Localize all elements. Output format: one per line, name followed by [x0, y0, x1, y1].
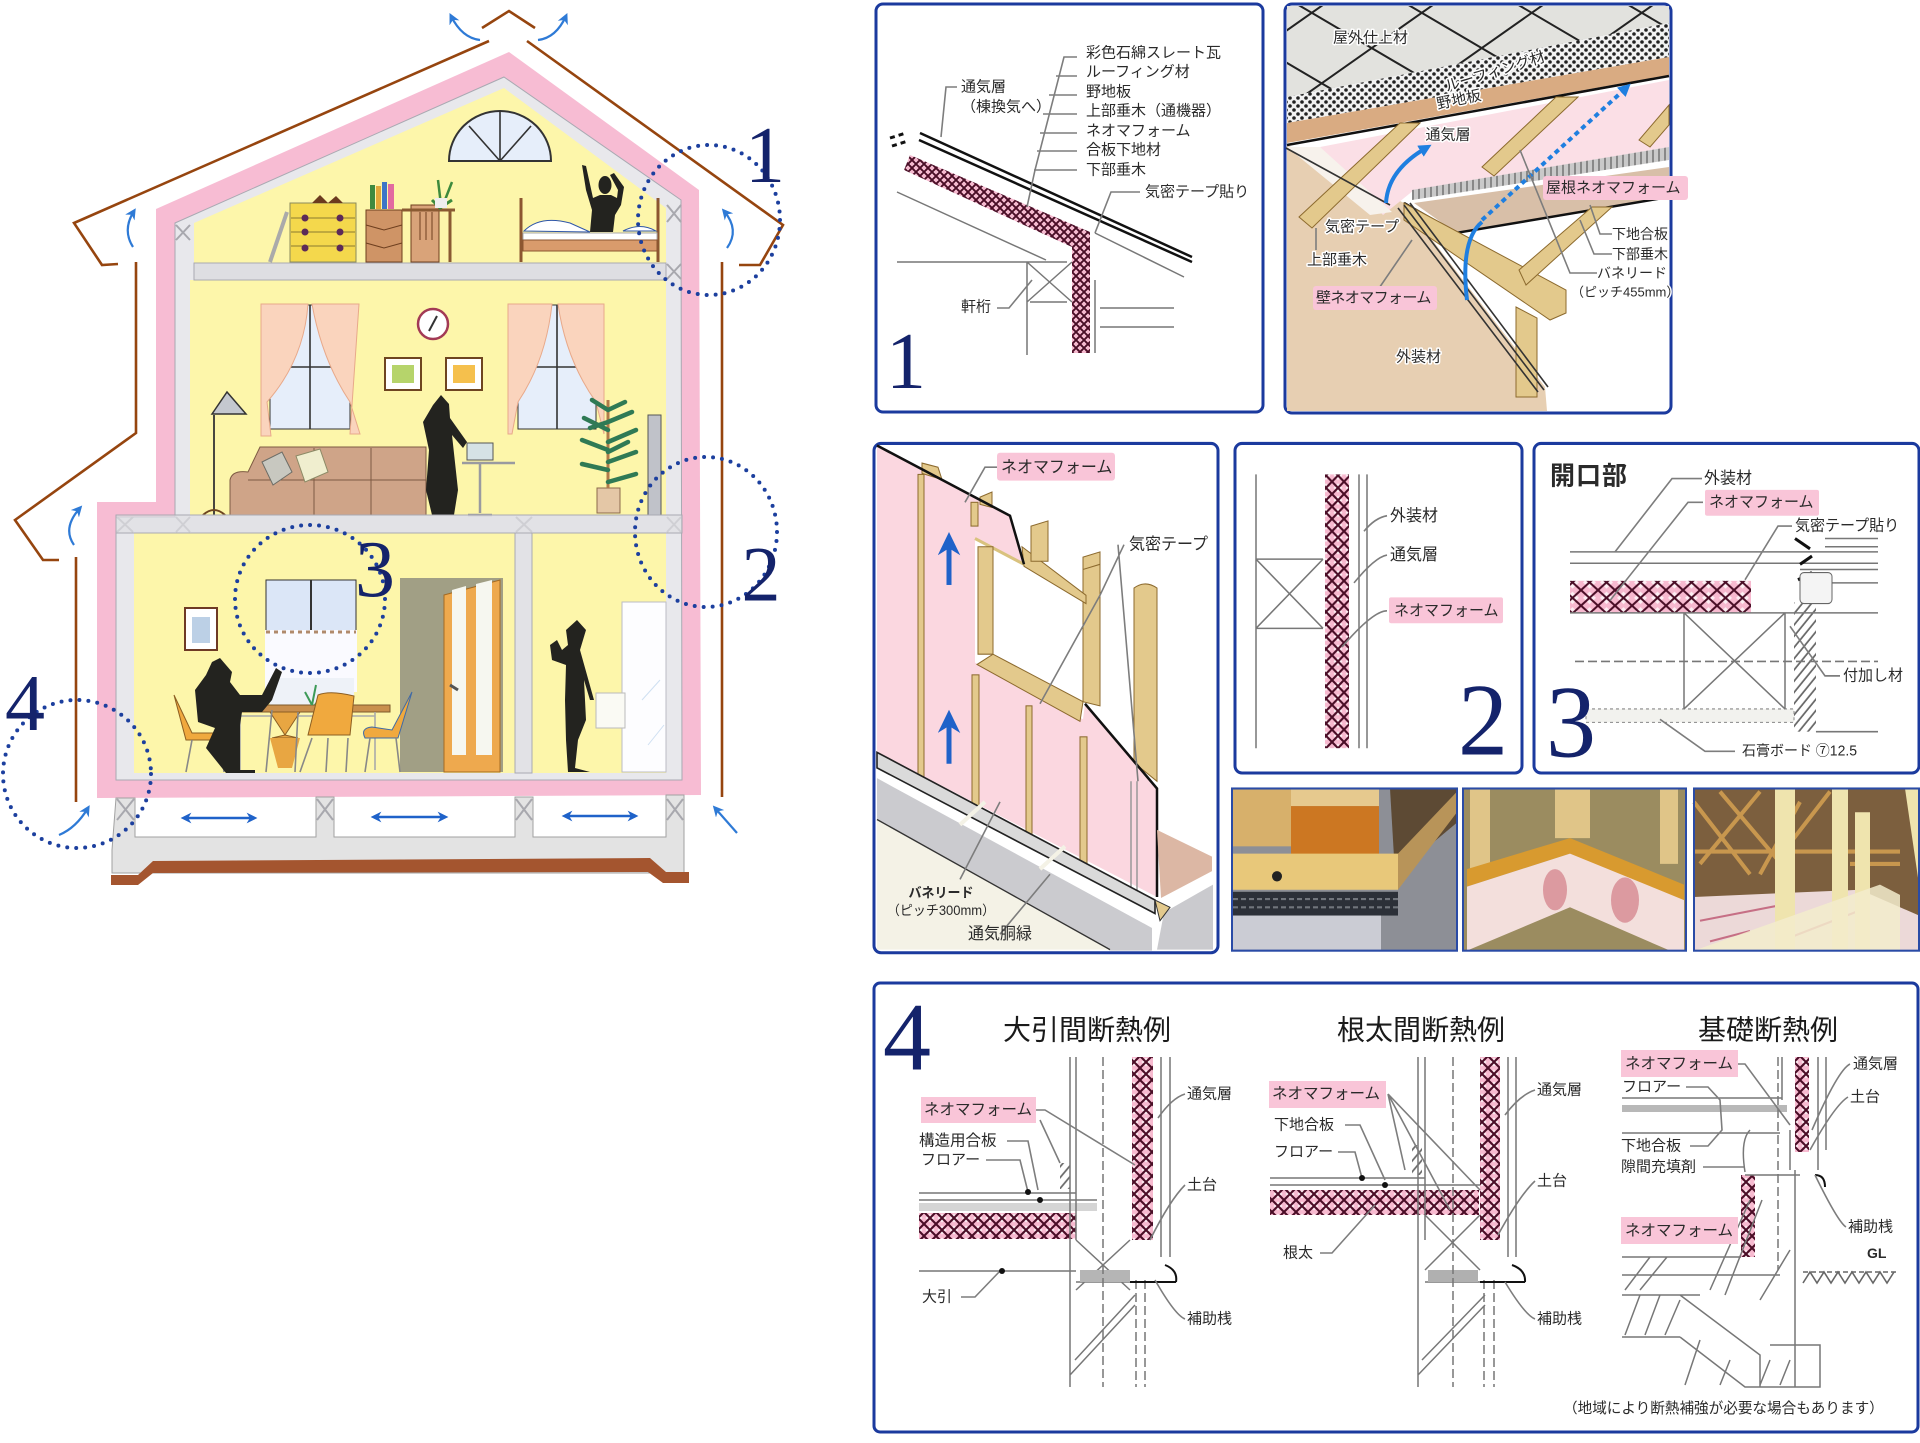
dotted detail circle 1 — [638, 145, 780, 295]
roof panel labels — [1307, 30, 1688, 366]
house cross-section illustration — [3, 11, 785, 885]
far post and studs — [922, 463, 1157, 781]
roof panel labels: ルーフィング材 — [1443, 49, 1547, 95]
joist section labels — [1269, 1081, 1582, 1328]
first floor living room — [134, 533, 515, 773]
photo 3: attic framing — [1694, 788, 1919, 951]
panel 1 labels: 下部垂木 — [1086, 162, 1146, 178]
foundation section labels: ネオマフォーム — [1625, 1222, 1733, 1240]
panel 3 labels: 外装材 — [1704, 469, 1752, 488]
roof panel labels: 屋外仕上材 — [1333, 30, 1408, 46]
refrigerator — [596, 602, 666, 772]
panel: roof ventilation perspective — [1284, 2, 1688, 414]
beige exterior wall — [1287, 145, 1547, 411]
panel 2 labels — [1389, 507, 1503, 623]
foundation section labels — [1621, 1050, 1898, 1261]
roof panel labels: 野地板 — [1435, 87, 1483, 113]
corner slab — [1155, 830, 1213, 950]
panel 1 labels: 彩色石綿スレート瓦 — [1086, 44, 1221, 62]
beam section labels: フロアー — [921, 1152, 980, 1168]
panel 3 labels — [1550, 462, 1903, 759]
first floor kitchen room — [532, 533, 666, 773]
panel 1 labels — [961, 44, 1249, 316]
bed — [521, 198, 658, 262]
panel 3 labels: 付加し材 — [1843, 667, 1903, 685]
potted plant — [582, 400, 636, 513]
leader lines — [1316, 150, 1612, 297]
picture on first floor wall — [185, 608, 217, 650]
kitchen window with cafe curtain — [265, 580, 357, 706]
heading: foundation insulation: 基礎断熱例 — [1698, 1014, 1838, 1046]
foundation section labels: 補助桟 — [1848, 1218, 1893, 1236]
ventilation arrows under the floor — [186, 816, 633, 818]
beam section labels: 構造用合板 — [919, 1132, 997, 1150]
grey structural frame — [116, 77, 682, 780]
leader lines — [1610, 479, 1840, 751]
wall panel labels: バネリード — [909, 885, 973, 900]
floor lamp — [203, 392, 246, 515]
hatched filler strip — [1794, 603, 1816, 732]
joist section labels: 通気層 — [1537, 1082, 1582, 1098]
foundation section labels: ネオマフォーム — [1625, 1054, 1733, 1072]
panel number 4: 4 — [883, 984, 931, 1090]
beam section labels: 通気層 — [1187, 1086, 1232, 1102]
photo 1: foundation corner — [1232, 788, 1457, 951]
panel 2: wall section detail — [1235, 443, 1522, 777]
foam wall section — [1325, 474, 1349, 748]
dining table — [230, 685, 390, 770]
joist section labels: 補助桟 — [1537, 1310, 1582, 1328]
outer brown cladding lines — [15, 11, 783, 802]
panel number 3: 3 — [1546, 664, 1596, 779]
panel 2 labels: 通気層 — [1390, 546, 1438, 564]
roof and structure lines — [890, 133, 1192, 355]
attic floor band — [194, 263, 666, 280]
silhouette: seated man reading — [195, 658, 282, 773]
wall panel labels: ネオマフォーム — [1001, 458, 1112, 476]
second floor room — [190, 280, 666, 515]
wall panel labels: 気密テープ — [1129, 536, 1208, 554]
beam section labels — [919, 1086, 1232, 1328]
roof panel labels: 気密テープ — [1325, 218, 1399, 236]
joist section labels: 下地合板 — [1274, 1116, 1334, 1134]
wall panel labels: （ピッチ300mm） — [887, 903, 995, 918]
roof panel labels: 外装材 — [1396, 348, 1441, 366]
floor structure band — [116, 515, 682, 533]
sofa with cushions — [230, 447, 426, 515]
panel 3: opening detail — [1534, 443, 1919, 779]
upward airflow arrows — [946, 544, 952, 764]
panel 4: floor and foundation details — [874, 983, 1918, 1432]
roof foam band — [1412, 147, 1669, 200]
second floor right window with curtains — [508, 304, 604, 434]
television — [648, 415, 661, 515]
silhouette: standing woman — [550, 620, 594, 772]
foundation section labels: GL — [1867, 1245, 1887, 1261]
panel number 1: 1 — [886, 318, 926, 406]
beam section labels: ネオマフォーム — [924, 1100, 1032, 1118]
roof panel labels: 下部垂木 — [1612, 246, 1668, 262]
cross bracing marks on frame — [117, 205, 683, 820]
eave stripe — [1287, 147, 1392, 215]
section lines — [1570, 538, 1878, 732]
foundation section labels: 通気層 — [1853, 1056, 1898, 1072]
foundation section labels: フロアー — [1622, 1078, 1681, 1096]
panel 1 labels: 軒桁 — [961, 298, 991, 316]
leader lines — [941, 57, 1140, 308]
panel 2 labels: 外装材 — [1390, 507, 1438, 525]
roof panel labels: バネリード — [1597, 265, 1667, 281]
airflow arrows around the eaves — [59, 16, 737, 835]
second floor left window with curtains — [261, 304, 360, 436]
dining chairs — [174, 692, 412, 772]
panel number 2: 2 — [1458, 662, 1508, 777]
foundation section labels: 下地合板 — [1621, 1138, 1681, 1154]
partition wall — [515, 533, 532, 773]
pink ventilation layer — [1320, 80, 1669, 215]
leader lines — [960, 467, 1138, 934]
diagram: foundation insulation section — [1622, 1057, 1898, 1387]
panel 1 labels: 野地板 — [1086, 84, 1131, 100]
wall layer lines — [1286, 148, 1548, 392]
panel 1 labels: 合板下地材 — [1086, 142, 1161, 158]
roof panel labels: 下地合板 — [1612, 226, 1668, 242]
wall panel labels — [887, 453, 1208, 943]
panel 3 labels: 開口部 — [1550, 462, 1628, 491]
roof panel labels: 壁ネオマフォーム — [1316, 290, 1431, 306]
blue airflow arrows — [1386, 88, 1626, 300]
door — [400, 578, 503, 772]
dotted roofing layer — [1287, 23, 1669, 123]
roof panel labels: 屋根ネオマフォーム — [1546, 180, 1681, 196]
joist section labels: フロアー — [1274, 1144, 1333, 1160]
number 1: 1 — [745, 112, 785, 200]
attic room yellow — [194, 88, 666, 263]
panel 1: eaves section detail — [876, 4, 1263, 412]
plaster board — [1586, 709, 1794, 722]
panel 1 labels: 気密テープ貼り — [1145, 184, 1249, 200]
number 2: 2 — [742, 530, 780, 618]
foundation — [112, 795, 684, 873]
roof panel labels: （ピッチ455mm） — [1571, 284, 1679, 300]
panel 3 labels: 気密テープ貼り — [1795, 517, 1899, 535]
attic furniture — [270, 180, 455, 262]
dotted detail circle 2 — [635, 457, 777, 607]
foam lintel — [1570, 581, 1751, 613]
number 3: 3 — [355, 526, 395, 614]
panel: wall ventilation perspective — [874, 443, 1218, 953]
roof panel labels: 上部垂木 — [1307, 252, 1367, 268]
black edge lines — [877, 445, 1157, 897]
beam section labels: 補助桟 — [1187, 1310, 1232, 1328]
panel 1 labels: ネオマフォーム — [1086, 122, 1191, 140]
joist section labels: ネオマフォーム — [1272, 1084, 1380, 1102]
silhouette: standing woman at laptop — [423, 395, 467, 515]
diagram: beam insulation section — [919, 1057, 1185, 1387]
silhouette: stretching person — [582, 165, 624, 232]
panel 3 labels: 石膏ボード ⑦12.5 — [1742, 742, 1857, 759]
foundation section labels: 土台 — [1850, 1088, 1880, 1106]
wall pictures — [385, 358, 482, 390]
heading: beam insulation: 大引間断熱例 — [1003, 1014, 1171, 1046]
joist section labels: 土台 — [1537, 1172, 1567, 1190]
panel 1 labels: ルーフィング材 — [1086, 64, 1190, 80]
panel 1 labels: （棟換気へ） — [961, 98, 1051, 116]
foundation paving — [877, 778, 1152, 951]
wall panel labels: 通気胴緑 — [968, 925, 1032, 943]
pink wall insulation — [877, 445, 1157, 897]
laptop table — [462, 443, 515, 515]
panel 1 labels: 上部垂木（通機器） — [1086, 102, 1221, 120]
beam section labels: 大引 — [922, 1288, 952, 1306]
roof panel labels: 通気層 — [1425, 126, 1471, 144]
arched attic window — [449, 111, 551, 161]
brown footing — [111, 858, 689, 885]
panel 3 labels: ネオマフォーム — [1709, 494, 1814, 511]
footnote: （地域により断熱補強が必要な場合もあります） — [1563, 1400, 1884, 1417]
dotted detail circle 4 — [3, 700, 151, 848]
photo 2: insulated corner — [1463, 788, 1686, 951]
dotted detail circle 3 — [235, 525, 385, 673]
joist section labels: 根太 — [1283, 1244, 1313, 1262]
diagram: joist insulation section — [1270, 1057, 1535, 1387]
slate roof tiles — [1287, 6, 1669, 97]
leader lines — [1342, 516, 1387, 647]
beam section labels: 土台 — [1187, 1176, 1217, 1194]
sheathing board band — [1287, 57, 1669, 143]
panel 2 labels: ネオマフォーム — [1394, 602, 1499, 619]
foundation section labels: 隙間充填剤 — [1621, 1158, 1696, 1176]
section lines — [1256, 474, 1367, 748]
base flashing — [877, 752, 1155, 913]
vent battens — [918, 474, 1137, 900]
pink insulation envelope — [97, 52, 701, 798]
heading: joist insulation: 根太間断熱例 — [1337, 1014, 1505, 1046]
wall clock — [418, 309, 448, 339]
panel 1 labels: 通気層 — [961, 78, 1006, 96]
foam insulation section — [904, 155, 1090, 353]
timber rafters and beams — [1299, 97, 1669, 397]
number 4: 4 — [5, 660, 45, 748]
